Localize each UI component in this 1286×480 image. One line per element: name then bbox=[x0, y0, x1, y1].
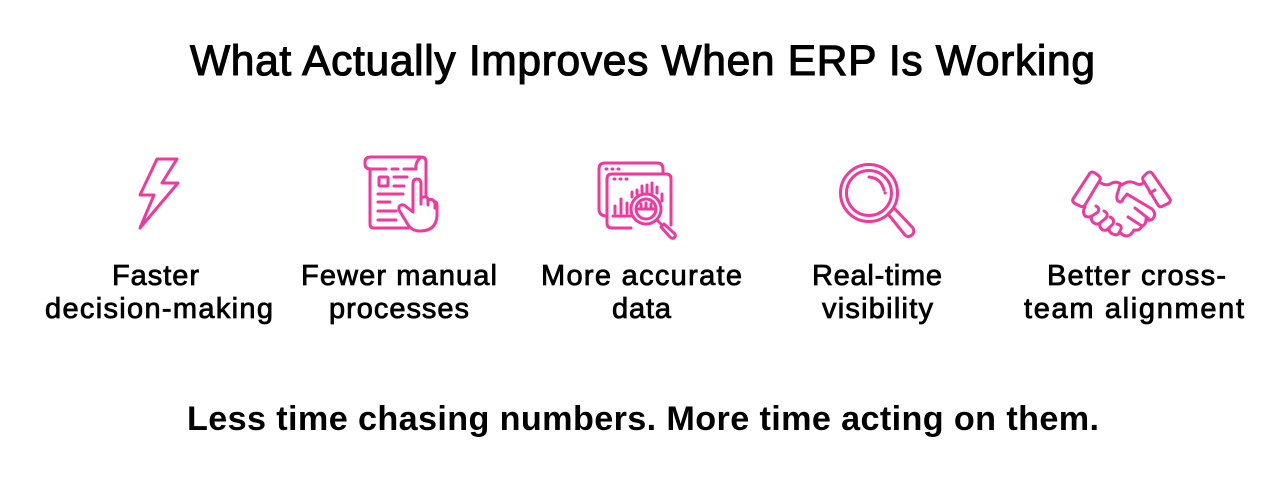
icon: document with pointing hand bbox=[365, 157, 437, 231]
label: real-time visibility bbox=[812, 260, 942, 325]
label: fewer manual processes: processes bbox=[329, 293, 469, 325]
item: more accurate data bbox=[541, 163, 742, 325]
icon: dashboard windows with magnifier bbox=[599, 163, 675, 238]
label: better cross-team alignment: Better cross- bbox=[1047, 260, 1226, 292]
label: more accurate data bbox=[541, 260, 742, 325]
icon: magnifying glass bbox=[840, 164, 914, 236]
label: faster decision-making: Faster bbox=[112, 260, 199, 292]
label: fewer manual processes bbox=[301, 260, 497, 325]
label: faster decision-making bbox=[45, 260, 273, 325]
label: more accurate data: data bbox=[612, 293, 672, 325]
label: fewer manual processes: Fewer manual bbox=[301, 260, 497, 292]
footer tagline: Less time chasing numbers. More time acting on them. bbox=[187, 400, 1099, 438]
label: better cross-team alignment bbox=[1024, 260, 1244, 325]
label: more accurate data: More accurate bbox=[541, 260, 742, 292]
label: real-time visibility: Real-time bbox=[812, 260, 942, 292]
label: better cross-team alignment: team alignment bbox=[1024, 293, 1244, 325]
item: better cross-team alignment bbox=[1024, 172, 1244, 325]
item: faster decision-making bbox=[45, 159, 273, 325]
item: fewer manual processes bbox=[301, 157, 497, 325]
icon: lightning bolt bbox=[140, 159, 178, 228]
item: real-time visibility bbox=[812, 164, 942, 325]
icon: handshake bbox=[1073, 172, 1170, 236]
label: real-time visibility: visibility bbox=[822, 293, 934, 325]
label: faster decision-making: decision-making bbox=[45, 293, 273, 325]
title: What Actually Improves When ERP Is Working bbox=[190, 38, 1095, 85]
